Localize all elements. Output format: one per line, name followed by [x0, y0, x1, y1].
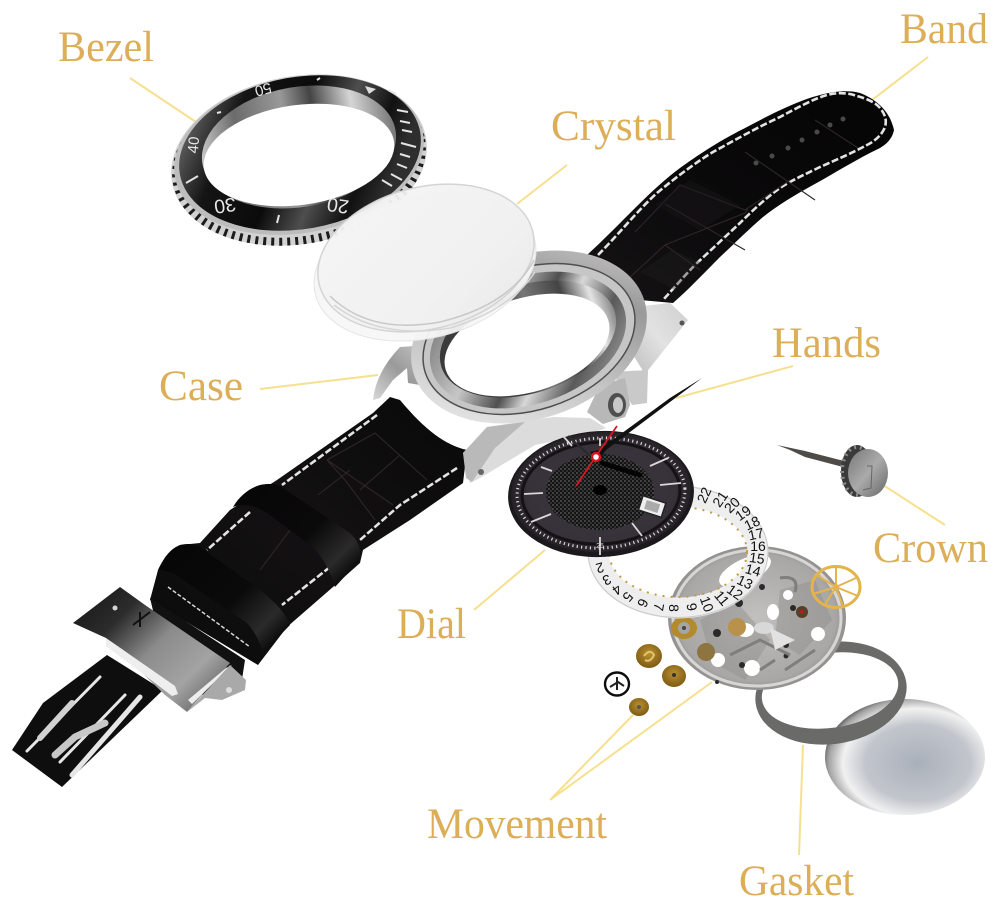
case: [373, 222, 688, 483]
clasp: brushed cover: [73, 587, 230, 712]
date ring: numerals: 17: [747, 525, 765, 543]
label: Case: Case: [159, 363, 243, 410]
date ring: numerals: 18: [742, 512, 763, 534]
hands: [568, 378, 702, 486]
date ring: numerals: 14: [743, 560, 763, 580]
date ring: numerals: 19: [732, 502, 754, 524]
date ring: numerals: 9: [683, 602, 701, 612]
case: left upper lug: [373, 345, 430, 400]
label: Bezel: Bezel: [58, 24, 154, 71]
bezel: numerals: 20: [326, 193, 350, 217]
case: right lug: [630, 303, 688, 374]
dial: textured centre: [546, 454, 654, 530]
balance wheel: [812, 566, 860, 608]
case back: [825, 699, 985, 815]
label: Dial: Dial: [397, 601, 466, 648]
bezel: numerals: 30: [213, 193, 237, 217]
movement: cut-outs: [711, 548, 825, 676]
label: Crown: Crown: [873, 525, 988, 572]
crown: [777, 445, 888, 497]
case: lower lug: [463, 417, 606, 483]
date ring: numerals: 20: [721, 494, 743, 516]
movement: small gears on plate: [728, 618, 746, 636]
clasp: strap end under buckle: [150, 598, 245, 698]
bezel: numerals: 50: [253, 79, 273, 99]
date ring: numerals: 22: [693, 484, 715, 505]
date ring: numerals: 15: [748, 549, 766, 567]
bezel: numerals: [185, 79, 350, 217]
case: crown guards: [587, 370, 648, 424]
bezel: inner wall: [192, 71, 406, 223]
case: central opening: [432, 275, 622, 415]
dial: date window: [638, 496, 666, 517]
date ring: numerals: 11: [711, 587, 733, 609]
date ring: numerals: 6: [634, 596, 652, 610]
date ring: numerals: [594, 484, 766, 614]
date ring: numerals: 8: [666, 604, 682, 612]
date ring: numerals: 16: [750, 538, 766, 554]
date ring: numerals: 4: [609, 581, 625, 599]
clasp: folded lower blade: [12, 655, 163, 787]
band: lower strap: [150, 397, 467, 665]
movement: loose parts: [605, 644, 686, 716]
bezel: numerals: 40: [185, 136, 203, 154]
dial: numerals: 25: [596, 543, 604, 550]
band: upper strap: [587, 91, 894, 303]
band: strap keeper upper: [233, 484, 361, 587]
dial: [505, 426, 697, 562]
movement: [605, 546, 846, 716]
movement: details: [713, 584, 796, 684]
bezel: opening: [197, 92, 401, 218]
gasket: [755, 641, 907, 745]
label: Hands: Hands: [772, 320, 881, 367]
date ring: numerals: 21: [709, 488, 731, 510]
date ring: numerals: 12: [724, 581, 746, 603]
date ring: numerals: 2: [594, 559, 606, 577]
date ring: numerals: 5: [619, 589, 637, 605]
date ring: numerals: 7: [650, 602, 668, 612]
bezel: [157, 55, 441, 265]
bezel: black insert: [167, 57, 433, 249]
crown: face: [848, 449, 888, 497]
label: Crystal: Crystal: [551, 103, 676, 150]
dial: minute track: [514, 434, 688, 552]
bezel: tick marks: [186, 78, 416, 223]
crystal: [298, 162, 552, 363]
case: outer ring: [389, 222, 669, 452]
date ring: numerals: 3: [600, 571, 614, 589]
label: Movement: Movement: [427, 801, 607, 848]
band: strap keeper lower: [158, 544, 290, 653]
dial: hour markers: [524, 436, 681, 555]
clasp: [12, 587, 250, 787]
movement: bridges: [700, 580, 832, 680]
label: Gasket: Gasket: [739, 858, 854, 905]
date ring: numerals: 10: [697, 594, 717, 614]
bezel: toothed outer edge: [157, 55, 441, 265]
label: Band: Band: [900, 6, 988, 53]
crown: knurled head: [841, 445, 873, 497]
date ring: numerals: 13: [735, 571, 756, 593]
leader lines: [130, 57, 945, 855]
date ring: [588, 484, 768, 618]
crown: stem: [777, 445, 844, 467]
